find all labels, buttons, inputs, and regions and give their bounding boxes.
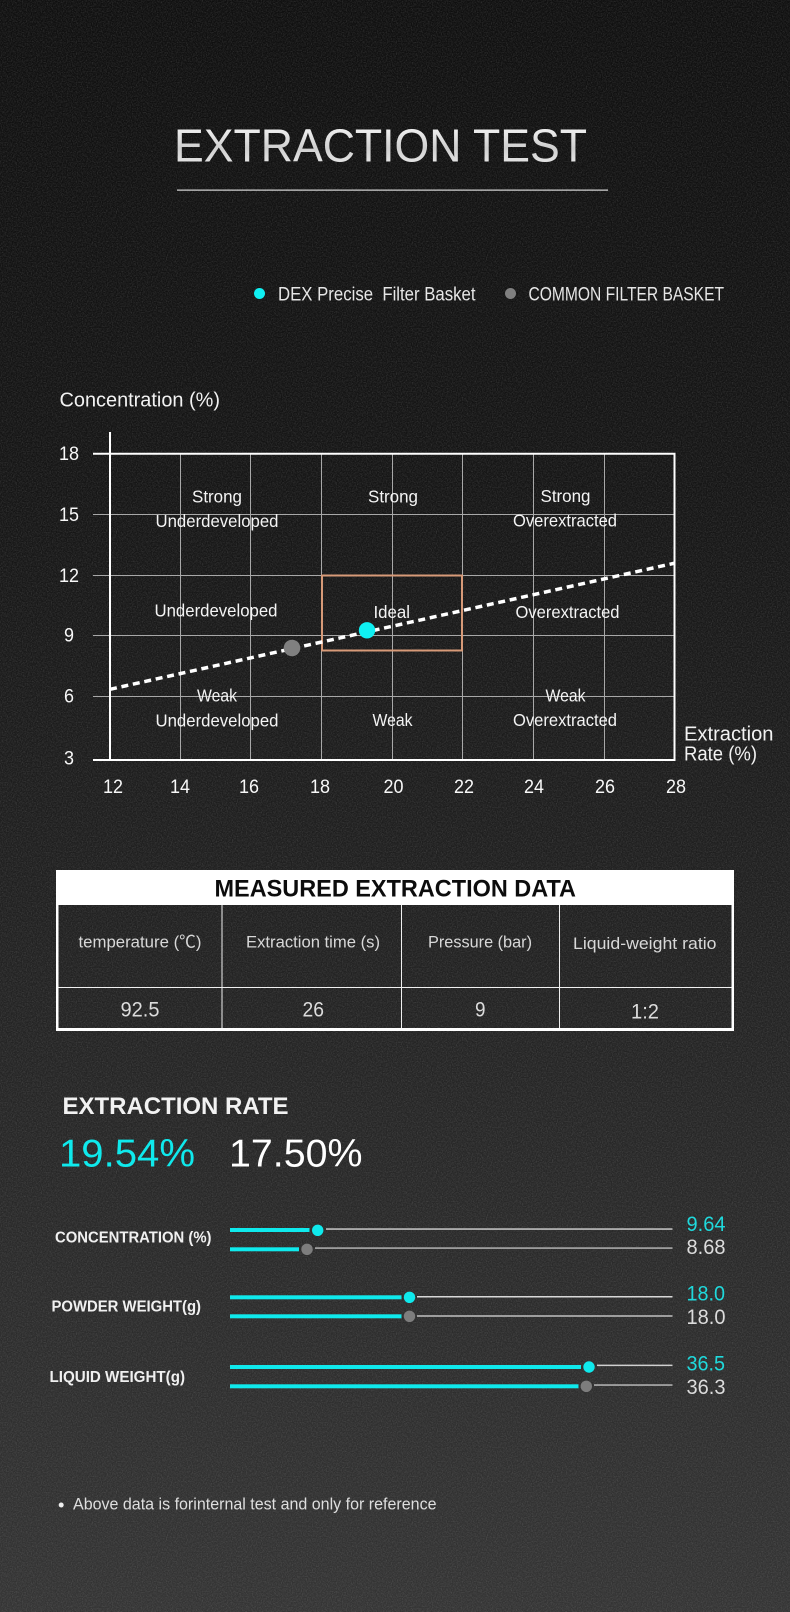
table header cells: Extraction time (s)	[246, 932, 380, 952]
y-axis ticks: 15	[59, 505, 79, 526]
x-axis ticks: 24	[524, 777, 544, 798]
zone labels: Underdeveloped	[156, 511, 278, 531]
table values: 92.5	[120, 998, 160, 1022]
data point: DEX precise filter basket	[359, 622, 375, 638]
extraction rate values: 19.54%	[59, 1132, 195, 1176]
zone labels: Underdeveloped	[156, 710, 278, 730]
table values: 1:2	[631, 1000, 659, 1024]
extraction rate heading: EXTRACTION RATE	[62, 1093, 288, 1120]
legend	[254, 284, 724, 306]
data point: common filter basket	[284, 640, 300, 656]
ideal zone	[322, 576, 462, 650]
zone labels: Strong	[540, 486, 590, 506]
table header cells	[78, 932, 716, 953]
table values: 9	[475, 998, 486, 1022]
axes and frame	[93, 432, 674, 760]
footnote: Above data is forinternal test and only for reference	[73, 1494, 436, 1514]
x-axis ticks: 18	[310, 777, 330, 798]
comparison: liquid weight: LIQUID WEIGHT(g)	[50, 1369, 185, 1386]
zone labels: Overextracted	[513, 710, 617, 730]
zone labels: Weak	[546, 686, 586, 706]
extraction rate values	[59, 1132, 362, 1176]
table header cells: Pressure (bar)	[428, 932, 532, 952]
zone labels: Overextracted	[516, 602, 620, 622]
trend line	[110, 563, 674, 689]
comparison: powder weight	[52, 1282, 726, 1329]
x-axis title: Extraction	[684, 724, 774, 746]
legend: DEX Precise Filter Basket	[278, 284, 476, 306]
zone labels: Overextracted	[513, 510, 617, 530]
x-axis ticks: 16	[239, 777, 259, 798]
y-axis title: Concentration (%)	[60, 390, 220, 412]
x-axis ticks: 28	[666, 777, 686, 798]
x-axis ticks: 22	[454, 777, 474, 798]
zone labels: Weak	[372, 710, 413, 730]
comparison: concentration: 8.68	[686, 1236, 726, 1259]
y-axis ticks: 3	[64, 748, 74, 770]
table: measured extraction data	[56, 870, 734, 1031]
x-axis ticks	[103, 777, 686, 798]
comparison: powder weight: POWDER WEIGHT(g)	[52, 1298, 201, 1316]
x-axis title	[684, 724, 774, 766]
grid lines	[93, 454, 674, 760]
y-axis ticks: 6	[64, 686, 74, 708]
table frame and header band	[56, 870, 734, 1031]
extraction rate values: 17.50%	[229, 1132, 362, 1176]
x-axis ticks: 12	[103, 777, 123, 798]
comparison: powder weight: 18.0	[686, 1306, 726, 1329]
comparison: concentration: 9.64	[686, 1213, 726, 1236]
zone labels	[154, 486, 620, 730]
comparison: liquid weight: 36.5	[686, 1352, 725, 1376]
table heading: MEASURED EXTRACTION DATA	[214, 876, 576, 902]
table dividers	[58, 905, 732, 1028]
zone labels: Weak	[197, 686, 237, 706]
zone labels: Strong	[192, 486, 242, 506]
table header cells: temperature (℃)	[78, 932, 202, 952]
zone labels: Strong	[368, 486, 418, 506]
title: EXTRACTION TEST	[174, 120, 587, 172]
table header cells: Liquid-weight ratio	[573, 934, 716, 953]
zone labels: Ideal	[374, 602, 410, 622]
comparison: concentration: CONCENTRATION (%)	[55, 1230, 212, 1246]
zone labels: Underdeveloped	[154, 600, 278, 620]
chart: concentration vs extraction rate	[59, 390, 774, 798]
comparison: powder weight: 18.0	[686, 1282, 725, 1306]
x-axis ticks: 14	[170, 777, 190, 798]
y-axis ticks: 18	[59, 444, 79, 465]
table values: 26	[302, 998, 324, 1022]
x-axis ticks: 20	[384, 777, 404, 798]
comparison: concentration	[55, 1213, 726, 1259]
x-axis title: Rate (%)	[684, 744, 757, 766]
x-axis ticks: 26	[595, 777, 615, 798]
y-axis ticks	[59, 444, 79, 770]
legend: COMMON FILTER BASKET	[528, 284, 724, 306]
table values	[120, 998, 659, 1024]
comparison: liquid weight	[50, 1352, 726, 1399]
y-axis ticks: 12	[59, 566, 79, 587]
comparison: liquid weight: 36.3	[686, 1376, 726, 1399]
y-axis ticks: 9	[64, 626, 74, 646]
